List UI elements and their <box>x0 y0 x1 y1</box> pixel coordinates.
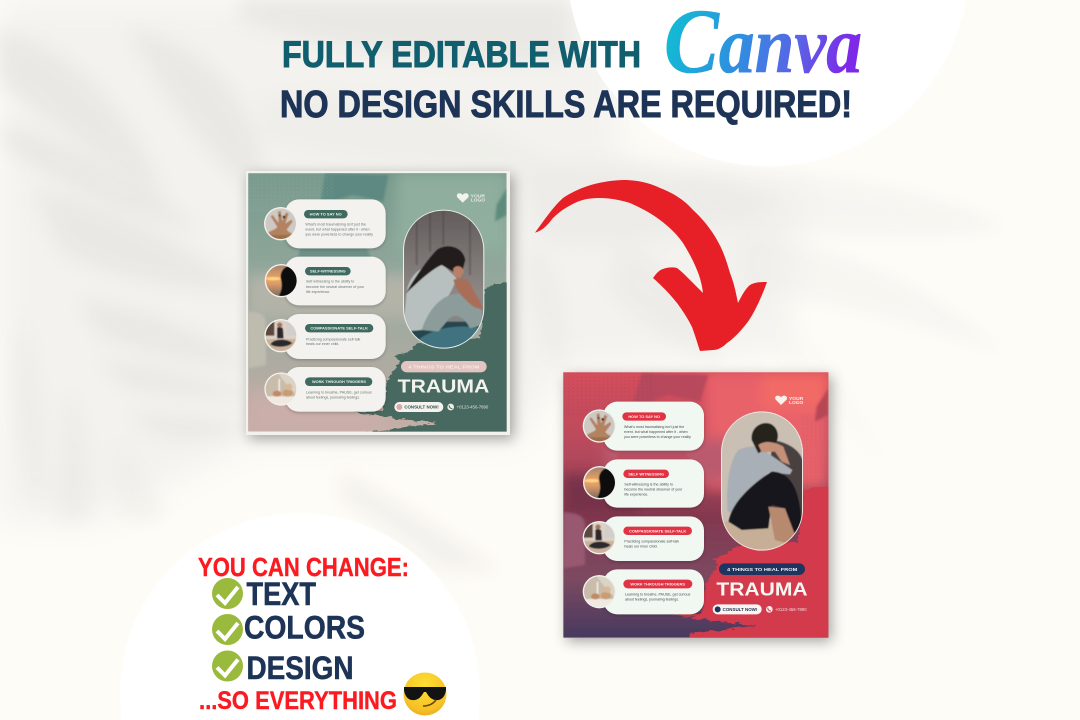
item pill: self-witnessing: become the neutral observer of your <box>306 285 365 289</box>
item pill: compassionate self-talk: COMPASSIONATE SELF-TALK <box>310 326 368 331</box>
list item: text <box>212 576 316 612</box>
heading: fully editable with: FULLY EDITABLE WITH <box>282 34 641 75</box>
item pill: how to say no <box>264 199 386 248</box>
item pill: self witnessing: become the neutral observer of your <box>624 487 683 491</box>
button: consult now: CONSULT NOW! <box>723 607 758 612</box>
photo: candles <box>264 372 298 406</box>
item pill: how to say no: What's most traumatizing isn't just the <box>624 425 684 429</box>
item pill: how to say no: event, but what happened after it - when <box>305 227 370 231</box>
item pill: work through triggers: WORK THROUGH TRIGGERS <box>630 581 685 586</box>
red brush shape <box>672 486 832 642</box>
list item: text: TEXT <box>246 576 316 612</box>
title pill: 4 things to heal from: 4 THINGS TO HEAL FROM <box>727 567 797 573</box>
item pill: compassionate self talk: COMPASSIONATE SELF-TALK <box>629 528 686 533</box>
logo: your logo: LOGO <box>789 400 804 405</box>
contact: phone number: +0123-456-7890 <box>775 607 807 612</box>
icon: check <box>212 578 243 609</box>
item pill: how to say no: event, but what happened after it - when <box>624 430 688 434</box>
photo: sunset <box>583 466 616 499</box>
icon: check <box>212 650 243 682</box>
item pill: compassionate self talk: Practicing compassionate self-talk <box>624 540 679 544</box>
photo: yoga <box>583 521 616 554</box>
item pill: self witnessing: SELF WITNESSING <box>628 471 664 476</box>
item pill: how to say no: What's most traumatizing isn't just the <box>305 222 366 226</box>
photo: woman covering face <box>721 411 803 551</box>
list item: colors: COLORS <box>244 610 365 646</box>
logo: your logo: LOGO <box>471 198 486 203</box>
item pill: compassionate self talk <box>583 516 704 561</box>
icon: check <box>212 614 243 645</box>
item pill: how to say no: HOW TO SAY NO <box>310 212 342 217</box>
icon: sunglasses emoji <box>403 672 447 716</box>
item pill: work through triggers <box>583 569 704 614</box>
photo: yoga <box>264 319 298 352</box>
item pill: compassionate self-talk: Practicing compassionate self-talk <box>306 337 360 341</box>
list item: design: DESIGN <box>246 650 354 686</box>
item pill: compassionate self-talk: heals our inner child. <box>306 342 339 346</box>
item pill: work through triggers: WORK THROUGH TRIGGERS <box>312 379 366 384</box>
green template background <box>248 173 507 432</box>
item pill: self witnessing: life experience. <box>624 492 648 496</box>
title: trauma: TRAUMA <box>716 579 808 600</box>
contact: phone number <box>447 404 489 410</box>
item pill: work through triggers: Learning to breathe, PAUSE, get curious <box>306 390 372 394</box>
photo: candles <box>583 575 616 608</box>
green brush shape <box>353 282 510 436</box>
photo: hand <box>583 409 616 443</box>
white circle bottom left <box>120 513 480 720</box>
arrow: red curved arrow between templates <box>535 180 767 351</box>
item pill: self-witnessing <box>265 257 386 305</box>
button: consult now <box>713 604 762 614</box>
item pill: how to say no: HOW TO SAY NO <box>628 414 660 419</box>
contact: phone number <box>766 606 807 613</box>
item pill: self-witnessing: Self witnessing is the ability to <box>306 280 354 284</box>
item pill: work through triggers: about feelings, journaling feelings. <box>306 395 360 399</box>
item pill: work through triggers: Learning to breathe, PAUSE, get curious <box>625 593 690 597</box>
panel: red template <box>563 372 832 642</box>
item pill: how to say no <box>583 402 704 451</box>
title pill: 4 things to heal from <box>401 361 487 372</box>
item pill: self-witnessing: SELF-WITNESSING <box>310 269 346 274</box>
item pill: work through triggers <box>264 367 386 412</box>
red template background <box>563 372 828 638</box>
photo: sunset <box>265 264 298 297</box>
text: so everything: ...SO EVERYTHING <box>199 687 397 715</box>
item pill: work through triggers: about feelings, journaling feelings. <box>625 598 679 602</box>
item pill: how to say no: you were powerless to change your reality <box>305 233 373 237</box>
heading: no design skills are required: NO DESIGN SKILLS ARE REQUIRED! <box>280 84 852 126</box>
title pill: 4 things to heal from <box>719 563 805 575</box>
title: trauma: TRAUMA <box>398 376 489 397</box>
logo: your logo: YOUR <box>471 193 486 198</box>
item pill: compassionate self talk: heals our inner child. <box>624 544 658 548</box>
heading: you can change: YOU CAN CHANGE: <box>198 552 409 582</box>
logo: your logo: YOUR <box>789 396 804 401</box>
photo: sitting woman <box>403 210 484 349</box>
button: consult now <box>394 402 443 412</box>
item pill: self witnessing <box>583 459 704 508</box>
logo: your logo <box>457 193 486 203</box>
contact: phone number: +0123-456-7890 <box>457 405 489 410</box>
item pill: how to say no: you were powerless to change your reality <box>624 435 691 439</box>
photo: hand <box>264 207 297 240</box>
title pill: 4 things to heal from: 4 THINGS TO HEAL FROM <box>408 365 479 371</box>
item pill: compassionate self-talk <box>264 314 386 359</box>
button: consult now: CONSULT NOW! <box>404 405 439 410</box>
panel: green template <box>246 171 510 436</box>
white circle behind heading <box>570 0 966 166</box>
logo: your logo <box>775 396 804 405</box>
item pill: self witnessing: Self-witnessing is the ability to <box>624 482 673 486</box>
list item: design <box>212 650 354 686</box>
item pill: self-witnessing: life experience. <box>306 290 330 294</box>
